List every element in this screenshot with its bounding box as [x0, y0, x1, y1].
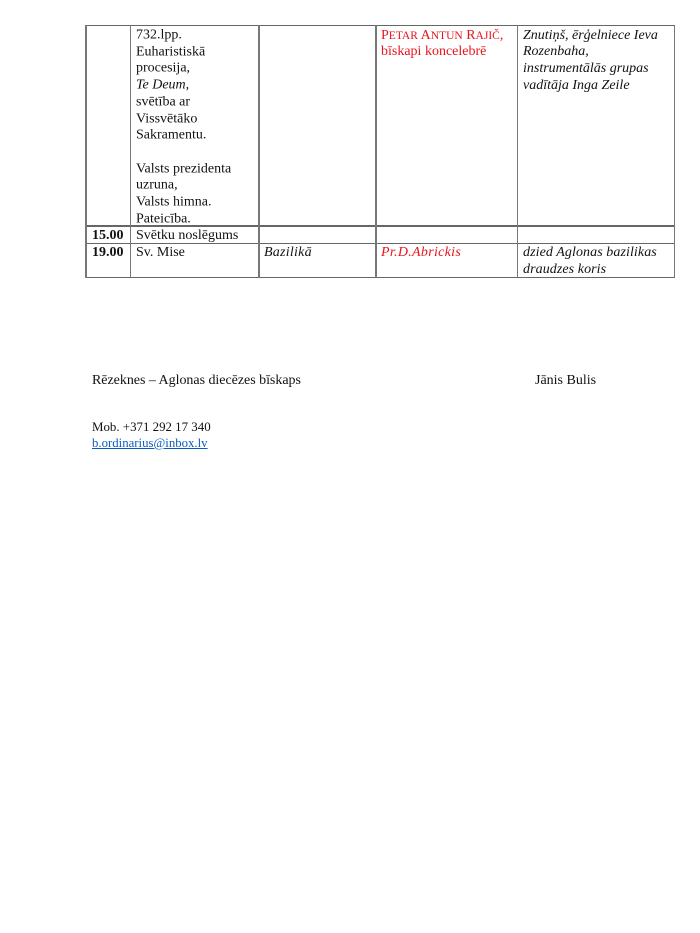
music text [522, 28, 658, 93]
row: 19.00 music [523, 245, 657, 277]
music text: Znutiņš, ērģelniece Ieva [523, 28, 658, 42]
row: 19.00 event: Sv. Mise [136, 245, 185, 260]
row: 19.00 place: Bazilikā [264, 245, 312, 260]
programme text: closing procession and address: uzruna, [136, 178, 178, 193]
programme text: closing procession and address: Valsts himna. [136, 195, 211, 210]
contact: email link: b.ordinarius@inbox.lv [92, 436, 208, 450]
music text: Rozenbaha, [523, 44, 589, 59]
signature: title: Rēzeknes – Aglonas diecēzes bīskaps [92, 372, 301, 388]
programme text: closing procession and address: Te Deum, [136, 78, 189, 93]
music text: instrumentālās grupas [523, 61, 649, 76]
row: 19.00 music: draudzes koris [523, 262, 606, 277]
programme text: closing procession and address: 732.lpp. [136, 28, 182, 42]
programme text: closing procession and address: Valsts prezidenta [136, 161, 231, 176]
celebrants text [381, 28, 503, 59]
programme text: closing procession and address: procesija, [136, 61, 190, 76]
programme text: closing procession and address: Euharistiskā [136, 44, 205, 59]
row: 15.00 event: Svētku noslēgums [136, 228, 238, 242]
music text: vadītāja Inga Zeile [523, 78, 630, 93]
row: 19.00 music: dzied Aglonas bazilikas [523, 245, 657, 260]
contact: phone: Mob. +371 292 17 340 [92, 420, 211, 434]
programme text: closing procession and address: Pateicība. [136, 211, 191, 226]
celebrants text: PETAR ANTUN RAJIČ, [381, 28, 503, 42]
row: 15.00 time: 15.00 [92, 228, 124, 242]
row: 19.00 celebrant: Pr.D.Abrickis [381, 245, 461, 260]
celebrants text: bīskapi koncelebrē [381, 44, 486, 59]
programme text: closing procession and address: Vissvētāko [136, 111, 197, 126]
row: 19.00 time: 19.00 [92, 245, 124, 260]
signature: name: Jānis Bulis [535, 372, 596, 388]
programme text: closing procession and address: Sakramentu. [136, 128, 206, 143]
programme text: closing procession and address [136, 28, 232, 226]
schedule table [85, 25, 675, 278]
programme text: closing procession and address: svētība ar [136, 94, 190, 109]
